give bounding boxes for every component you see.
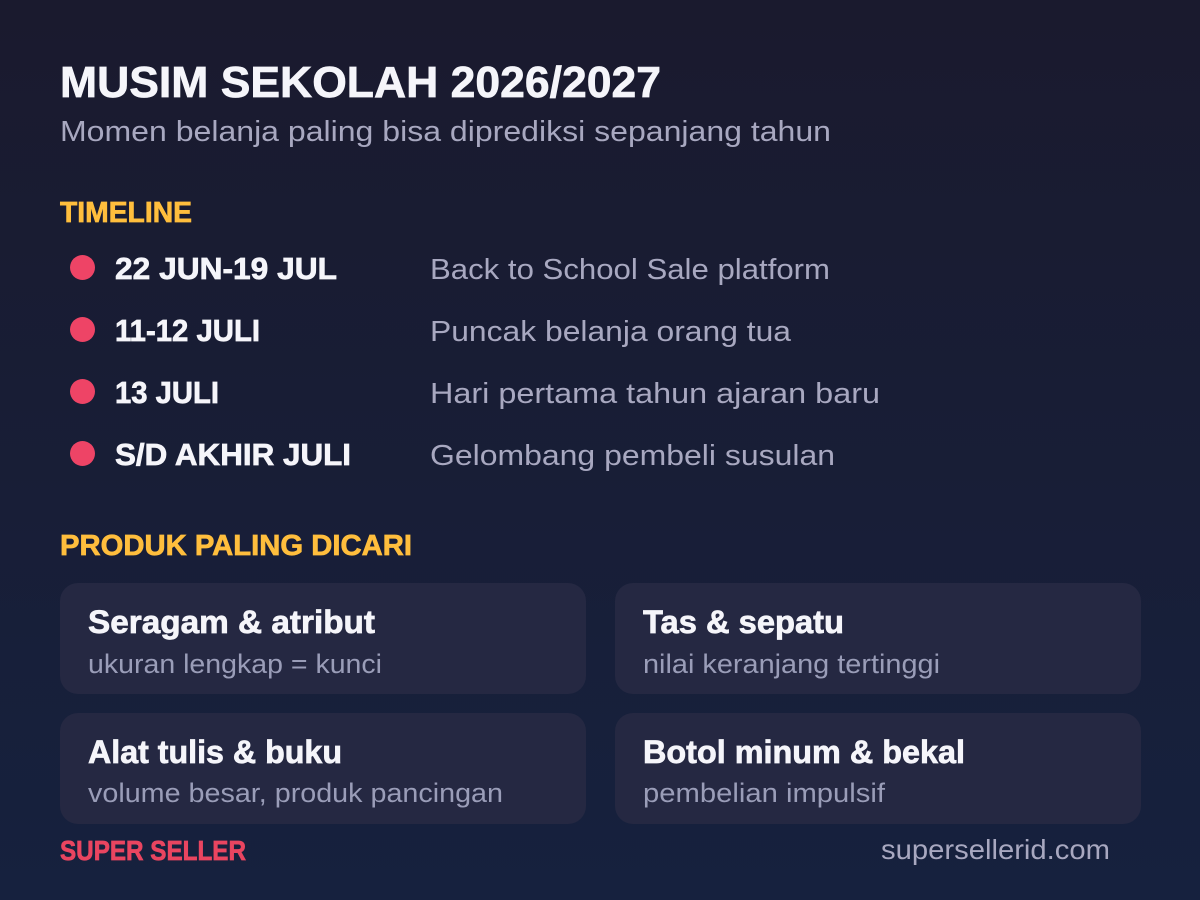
timeline row 4	[70, 437, 835, 472]
timeline row 2	[70, 313, 792, 348]
card: botol: pembelian impulsif	[643, 778, 886, 808]
timeline row 3: 13 JULI	[115, 375, 219, 410]
card: seragam: ukuran lengkap = kunci	[88, 649, 382, 679]
card: alat tulis: Alat tulis & buku	[88, 734, 342, 770]
card: tas: Tas & sepatu	[643, 604, 844, 640]
heading: produk paling dicari: PRODUK PALING DICARI	[60, 530, 412, 562]
card: botol: Botol minum & bekal	[643, 734, 965, 770]
card: seragam: Seragam & atribut	[88, 604, 375, 640]
title: MUSIM SEKOLAH 2026/2027	[60, 58, 661, 107]
timeline row 2: 11-12 JULI	[115, 313, 260, 348]
timeline row 1	[70, 251, 830, 286]
card: botol	[615, 713, 1141, 824]
website: supersellerid.com	[881, 834, 1110, 865]
subtitle: Momen belanja paling bisa diprediksi sepanjang tahun	[60, 116, 831, 148]
product cards	[60, 583, 1141, 824]
timeline row 1: 22 JUN-19 JUL	[115, 251, 337, 286]
timeline row 1: Back to School Sale platform	[430, 254, 830, 286]
timeline row 3: Hari pertama tahun ajaran baru	[430, 378, 880, 410]
heading: timeline: TIMELINE	[60, 197, 192, 229]
card: alat tulis	[60, 713, 586, 824]
timeline row 3	[70, 375, 880, 410]
card: tas	[615, 583, 1141, 694]
brand: SUPER SELLER	[60, 835, 246, 866]
timeline row 2: Puncak belanja orang tua	[430, 316, 792, 348]
card: tas: nilai keranjang tertinggi	[643, 649, 940, 679]
card: alat tulis: volume besar, produk pancingan	[88, 778, 503, 808]
timeline row 4: Gelombang pembeli susulan	[430, 440, 835, 472]
card: seragam	[60, 583, 586, 694]
timeline row 4: S/D AKHIR JULI	[115, 437, 351, 472]
timeline list	[70, 251, 880, 472]
